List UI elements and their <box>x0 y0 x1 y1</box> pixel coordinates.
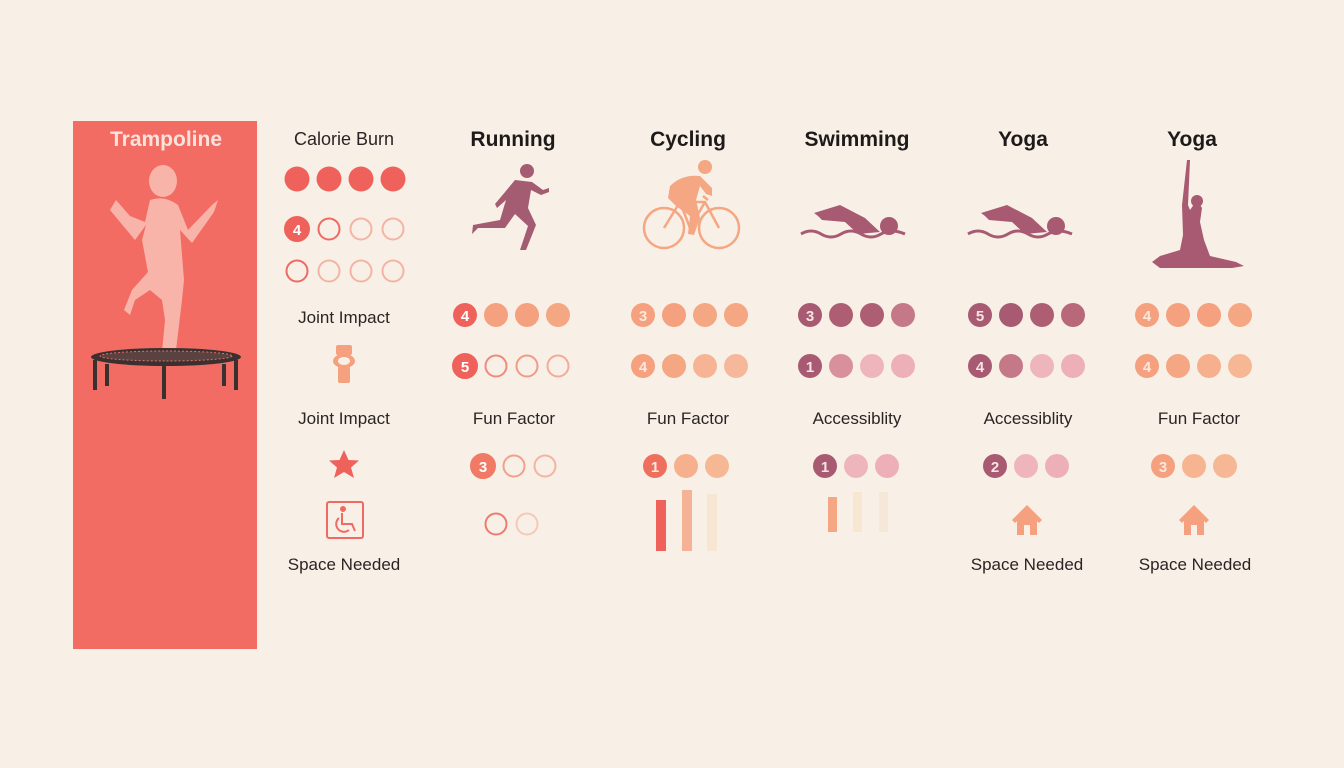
dots: running fun <box>471 454 556 478</box>
label: Space Needed: Space Needed <box>971 555 1083 574</box>
dots: yoga1 access: 2 <box>991 459 999 476</box>
column: yoga 1 <box>968 128 1085 574</box>
dots: swimming access <box>813 454 899 478</box>
dots: yoga1 row 2: 4 <box>976 359 985 376</box>
label: Joint Impact 2: Joint Impact <box>298 409 390 428</box>
icon: jumping woman <box>110 165 218 357</box>
dots: calorie row 2 <box>285 217 404 241</box>
label: Calorie Burn: Calorie Burn <box>294 129 394 149</box>
label: Fun Factor: Fun Factor <box>647 409 729 428</box>
dots: calorie row 3 <box>286 260 404 282</box>
dots: yoga2 fun: 3 <box>1159 459 1167 476</box>
dots: cycling row 1: 3 <box>639 308 647 325</box>
column: running <box>453 128 570 534</box>
icon: swimmer <box>801 205 905 237</box>
label: Accessiblity: Accessiblity <box>813 409 902 428</box>
dots: running extra <box>486 514 538 534</box>
icon: yoga pose <box>1152 160 1244 268</box>
icon: swimmer <box>968 205 1072 237</box>
column: swimming <box>798 128 915 532</box>
dots: swimming row 2 <box>798 354 915 378</box>
dots: yoga2 row 2: 4 <box>1143 359 1152 376</box>
bar chart: cycling <box>656 490 717 551</box>
dots: running row 1: 4 <box>461 308 470 325</box>
dots: cycling row 2 <box>631 354 748 378</box>
heading: Trampoline: Trampoline <box>110 128 222 151</box>
dots: yoga1 access <box>983 454 1069 478</box>
dots: running row 2: 5 <box>461 359 469 376</box>
column: labels <box>284 129 406 574</box>
dots: yoga2 row 2 <box>1135 354 1252 378</box>
icon: trampoline <box>91 348 241 399</box>
dots: calorie row 2: 4 <box>293 222 302 239</box>
dots: swimming row 2: 1 <box>806 359 814 376</box>
dots: running row 2 <box>453 354 568 378</box>
dots: cycling row 1 <box>631 303 748 327</box>
icon: runner <box>472 164 549 250</box>
heading: Running: Running <box>470 128 556 151</box>
heading: Swimming: Swimming <box>804 128 910 151</box>
column: cycling <box>631 128 748 551</box>
icon: cyclist <box>644 160 739 248</box>
label: Fun Factor: Fun Factor <box>473 409 555 428</box>
dots: swimming row 1 <box>798 303 915 327</box>
icon: joint <box>333 345 355 383</box>
dots: running fun: 3 <box>479 459 487 476</box>
icon: star <box>329 450 359 478</box>
dots: yoga1 row 1: 5 <box>976 308 984 325</box>
dots: calorie row 1 <box>284 166 406 192</box>
dots: cycling fun: 1 <box>651 459 659 476</box>
bar chart: swimming <box>828 492 888 532</box>
dots: cycling row 2: 4 <box>639 359 648 376</box>
heading: Yoga: Yoga <box>998 128 1048 151</box>
label: Fun Factor: Fun Factor <box>1158 409 1240 428</box>
panel: trampoline <box>73 121 257 649</box>
dots: swimming access: 1 <box>821 459 829 476</box>
icon: accessibility <box>327 502 363 538</box>
label: Space Needed: Space Needed <box>288 555 400 574</box>
label: Joint Impact: Joint Impact <box>298 308 390 327</box>
dots: yoga2 fun <box>1151 454 1237 478</box>
label: Accessiblity: Accessiblity <box>984 409 1073 428</box>
label: Space Needed: Space Needed <box>1139 555 1251 574</box>
dots: yoga1 row 2 <box>968 354 1085 378</box>
heading: Yoga: Yoga <box>1167 128 1217 151</box>
dots: yoga2 row 1: 4 <box>1143 308 1152 325</box>
dots: yoga1 row 1 <box>968 303 1085 327</box>
heading: Cycling: Cycling <box>650 128 726 151</box>
dots: yoga2 row 1 <box>1135 303 1252 327</box>
icon: house <box>1012 505 1042 535</box>
dots: swimming row 1: 3 <box>806 308 814 325</box>
column: yoga 2 <box>1135 128 1252 574</box>
dots: cycling fun <box>643 454 729 478</box>
icon: house <box>1179 505 1209 535</box>
dots: running row 1 <box>453 303 570 327</box>
